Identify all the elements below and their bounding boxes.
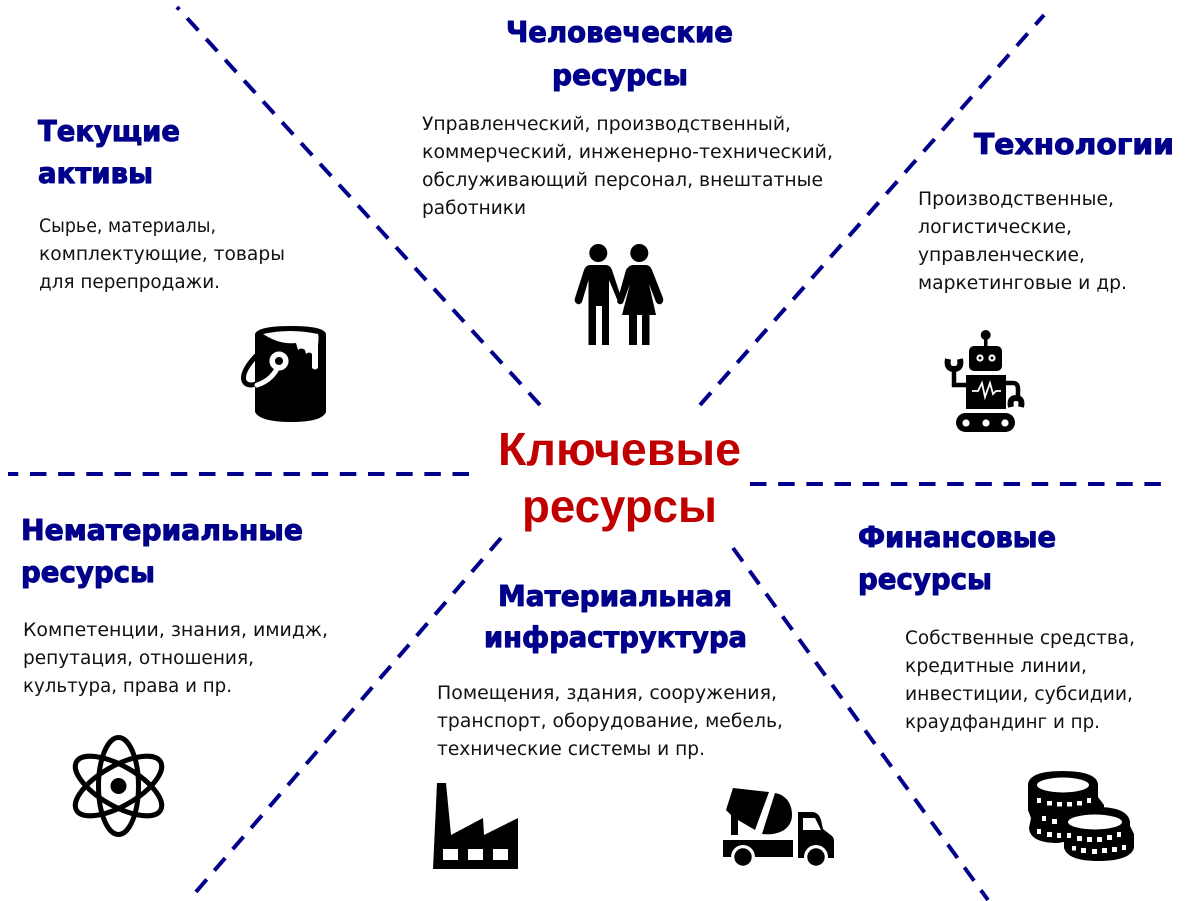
icon: factory xyxy=(433,783,518,869)
text: financial resources: кредитные линии, xyxy=(905,655,1087,677)
text: financial resources xyxy=(905,627,1135,733)
heading: current assets: Текущие xyxy=(38,115,180,148)
text: human resources: коммерческий, инженерно-технический, xyxy=(422,141,833,163)
text: current assets: комплектующие, товары xyxy=(39,243,285,265)
heading: material infrastructure: Материальная xyxy=(498,580,732,613)
panel: human resources xyxy=(422,16,833,345)
heading: technologies: Технологии xyxy=(974,128,1174,161)
text: human resources: обслуживающий персонал, внештатные xyxy=(422,169,823,191)
heading: intangible resources: ресурсы xyxy=(21,556,155,589)
text: technologies xyxy=(918,188,1127,294)
heading: financial resources: Финансовые xyxy=(858,521,1056,554)
text: technologies: Производственные, xyxy=(918,188,1114,210)
text: current assets xyxy=(39,215,285,293)
text: intangible resources: репутация, отношения, xyxy=(23,647,254,669)
icon: robot xyxy=(948,330,1021,432)
heading: financial resources: ресурсы xyxy=(858,563,992,596)
text: human resources xyxy=(422,113,833,219)
panel: intangible resources xyxy=(21,514,328,834)
heading: material infrastructure: инфраструктура xyxy=(484,621,747,654)
icon: paint bucket xyxy=(244,326,326,422)
text: material infrastructure xyxy=(437,682,783,760)
heading: human resources: Человеческие xyxy=(506,16,733,49)
center title xyxy=(498,423,741,532)
heading: human resources: ресурсы xyxy=(552,59,688,92)
icon: atom xyxy=(66,738,171,834)
text: financial resources: краудфандинг и пр. xyxy=(905,711,1100,733)
icon: concrete mixer truck xyxy=(723,788,834,869)
text: technologies: логистические, xyxy=(918,216,1072,238)
text: financial resources: Собственные средства, xyxy=(905,627,1135,649)
text: current assets: для перепродажи. xyxy=(39,271,220,293)
heading: current assets: активы xyxy=(38,157,153,190)
heading: intangible resources xyxy=(21,514,303,589)
text: current assets: Сырье, материалы, xyxy=(39,215,216,237)
text: human resources: работники xyxy=(422,197,526,219)
text: financial resources: инвестиции, субсидии, xyxy=(905,683,1133,705)
text: intangible resources: Компетенции, знания, имидж, xyxy=(23,619,328,641)
panel: current assets xyxy=(38,115,326,422)
heading: intangible resources: Нематериальные xyxy=(21,514,303,547)
panel: technologies xyxy=(918,128,1174,432)
text: material infrastructure: технические системы и пр. xyxy=(437,738,705,760)
text: material infrastructure: транспорт, оборудование, мебель, xyxy=(437,710,783,732)
icon: people xyxy=(575,244,663,345)
heading: material infrastructure xyxy=(484,580,747,654)
text: intangible resources: культура, права и пр. xyxy=(23,675,232,697)
text: technologies: маркетинговые и др. xyxy=(918,272,1127,294)
panel: financial resources xyxy=(858,521,1135,861)
icon: coins xyxy=(1028,771,1134,861)
text: human resources: Управленческий, производственный, xyxy=(422,113,791,135)
panel: material infrastructure xyxy=(433,580,834,869)
text: material infrastructure: Помещения, здания, сооружения, xyxy=(437,682,777,704)
heading: financial resources xyxy=(858,521,1056,596)
center title: Ключевые xyxy=(498,423,741,475)
heading: current assets xyxy=(38,115,180,190)
text: intangible resources xyxy=(23,619,328,697)
heading: human resources xyxy=(506,16,733,92)
text: technologies: управленческие, xyxy=(918,244,1085,266)
center title: ресурсы xyxy=(522,480,717,532)
